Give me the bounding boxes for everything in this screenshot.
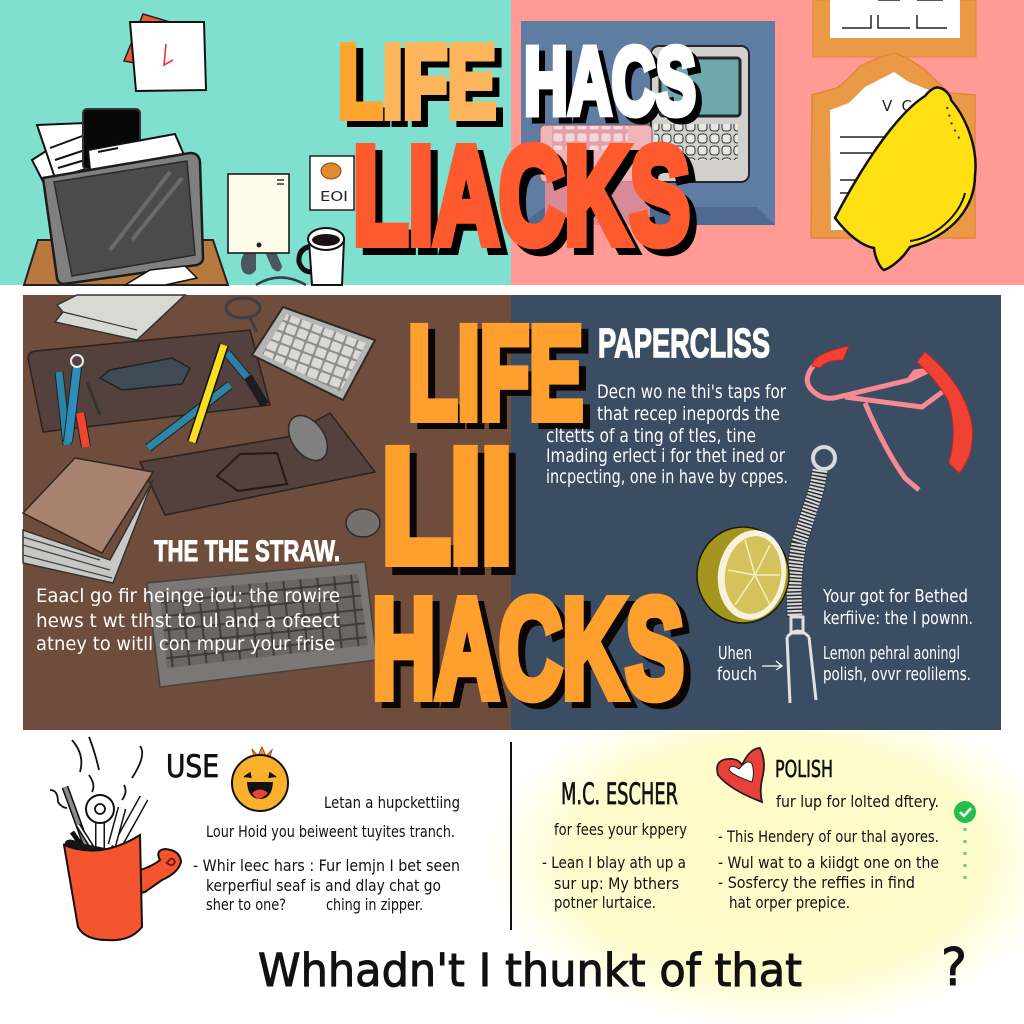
body text: use: sher to one? bbox=[206, 895, 286, 914]
poster with EOI label bbox=[310, 156, 354, 210]
body text: paperclips: cltetts of a ting of tles, tine bbox=[546, 425, 756, 447]
icon: yellow lemon bbox=[835, 87, 976, 270]
body text: use: - Whir leec hars : Fur lemjn I bet seen bbox=[193, 856, 460, 875]
heading: paperclips: PAPERCLISS bbox=[598, 320, 770, 366]
text block: zipper notes: kerfiive: the I pownn. bbox=[823, 608, 973, 629]
callout: when touch with arrow: fouch bbox=[717, 664, 757, 685]
heading: use: USE bbox=[166, 749, 219, 785]
text block: zipper notes bbox=[822, 586, 973, 685]
icon: zipper bbox=[787, 447, 835, 703]
text block: use bbox=[166, 749, 460, 914]
body text: use bbox=[193, 793, 460, 914]
body text: polish: - This Hendery of our thal ayores. bbox=[718, 827, 939, 846]
body text: polish: hat orper prepice. bbox=[729, 893, 850, 912]
body text: use: Letan a hupckettiing bbox=[324, 793, 460, 812]
illustration: orange frames bbox=[811, 0, 976, 238]
illustration: mouse mat and mouse bbox=[140, 408, 375, 515]
body text: the straw: atney to witll con mpur your frise bbox=[36, 633, 335, 655]
title word: LIFE: LIFE bbox=[408, 299, 583, 446]
body text: paperclips: Decn wo ne thi's taps for bbox=[597, 381, 786, 403]
body text: polish: - Sosfercy the reffies in find bbox=[718, 873, 915, 892]
icon: green check with marks bbox=[954, 801, 976, 886]
body text: m.c. escher: potner lurtaice. bbox=[554, 893, 656, 912]
panel: brown desk background bbox=[23, 295, 511, 730]
panel: navy background bbox=[511, 295, 1001, 730]
illustration: small keyboard bbox=[252, 307, 375, 400]
title word: LIFE: LIFE bbox=[338, 24, 496, 139]
icon: white tablet on stand bbox=[228, 174, 306, 285]
icon: sliced lemon bbox=[697, 526, 792, 624]
illustration: notebook bbox=[23, 458, 153, 583]
title word: LII: LII bbox=[382, 416, 512, 595]
heading: the straw: THE THE STRAW. bbox=[154, 535, 340, 568]
illustration: orange frames: VC bbox=[882, 97, 912, 115]
body text: paperclips: Imading erlect i for thet ined or bbox=[546, 445, 785, 467]
tagline: Whhadn't I thunkt of that bbox=[258, 944, 802, 997]
illustration: large keyboard bbox=[147, 509, 380, 687]
body text: use: Lour Hoid you beiweent tuyites tranch. bbox=[206, 822, 455, 841]
title word: HACKS: HACKS bbox=[372, 569, 684, 727]
body text: paperclips: incpecting, one in have by cppes. bbox=[546, 466, 788, 488]
question mark: ? bbox=[941, 938, 967, 998]
poster with EOI label: EOI bbox=[320, 190, 348, 205]
body text: m.c. escher: - Lean I blay ath up a bbox=[542, 853, 686, 872]
icon: red mug of tools bbox=[50, 737, 181, 940]
icon: laughing orange face bbox=[232, 747, 288, 811]
illustration: papers bbox=[55, 295, 185, 340]
body text: m.c. escher: sur up: My bthers bbox=[554, 874, 679, 893]
icon: red heart bbox=[717, 748, 764, 802]
yellow glow background bbox=[485, 690, 1024, 1024]
body text: m.c. escher: for fees your kppery bbox=[554, 820, 687, 839]
body text: polish: - Wul wat to a kiidgt one on the bbox=[718, 853, 939, 872]
text block: zipper notes: Your got for Bethed bbox=[822, 586, 968, 607]
main title: LIFE HACS LIACKS bbox=[338, 24, 696, 273]
central title: LIFE LII HACKS bbox=[372, 299, 684, 727]
callout: when touch with arrow: Uhen bbox=[718, 643, 752, 664]
body text: m.c. escher bbox=[542, 820, 687, 912]
body text: the straw: hews t wt tlhst to ul and a ofeect bbox=[36, 610, 340, 632]
body text: use: kerperfiul seaf is and dlay chat go bbox=[206, 876, 441, 895]
body text: polish bbox=[718, 792, 939, 912]
body text: the straw: Eaacl go fir heinge iou: the rowire bbox=[36, 585, 340, 607]
illustration: messy desk with monitor bbox=[24, 109, 228, 285]
icon: sticky note bbox=[124, 14, 206, 91]
body text: paperclips bbox=[546, 381, 788, 488]
title word: HACS: HACS bbox=[524, 28, 696, 135]
body text: polish: fur lup for lolted dftery. bbox=[776, 792, 939, 811]
text block: polish bbox=[718, 757, 939, 912]
top banner background bbox=[0, 0, 1024, 285]
text block: the straw bbox=[36, 535, 340, 655]
heading: polish: POLISH bbox=[775, 757, 833, 783]
title word: LIACKS: LIACKS bbox=[353, 119, 690, 273]
callout: when touch with arrow bbox=[717, 643, 782, 685]
body text: use: ching in zipper. bbox=[326, 895, 423, 914]
illustration: dark mat with pens bbox=[28, 298, 270, 448]
icon: coffee mug bbox=[299, 228, 344, 285]
text block: zipper notes: Lemon pehral aoningl bbox=[823, 643, 960, 664]
heading: m.c. escher: M.C. ESCHER bbox=[561, 777, 678, 811]
body text: paperclips: that recep inepords the bbox=[597, 403, 780, 425]
text block: paperclips bbox=[546, 320, 788, 488]
text block: m.c. escher bbox=[542, 777, 687, 912]
center divider line bbox=[510, 742, 512, 930]
illustration: calculator device on blue panel bbox=[521, 21, 775, 225]
text block: zipper notes: polish, ovvr reolilems. bbox=[823, 664, 971, 685]
body text: the straw bbox=[36, 585, 340, 655]
icon: bent red paperclip bbox=[807, 346, 972, 490]
